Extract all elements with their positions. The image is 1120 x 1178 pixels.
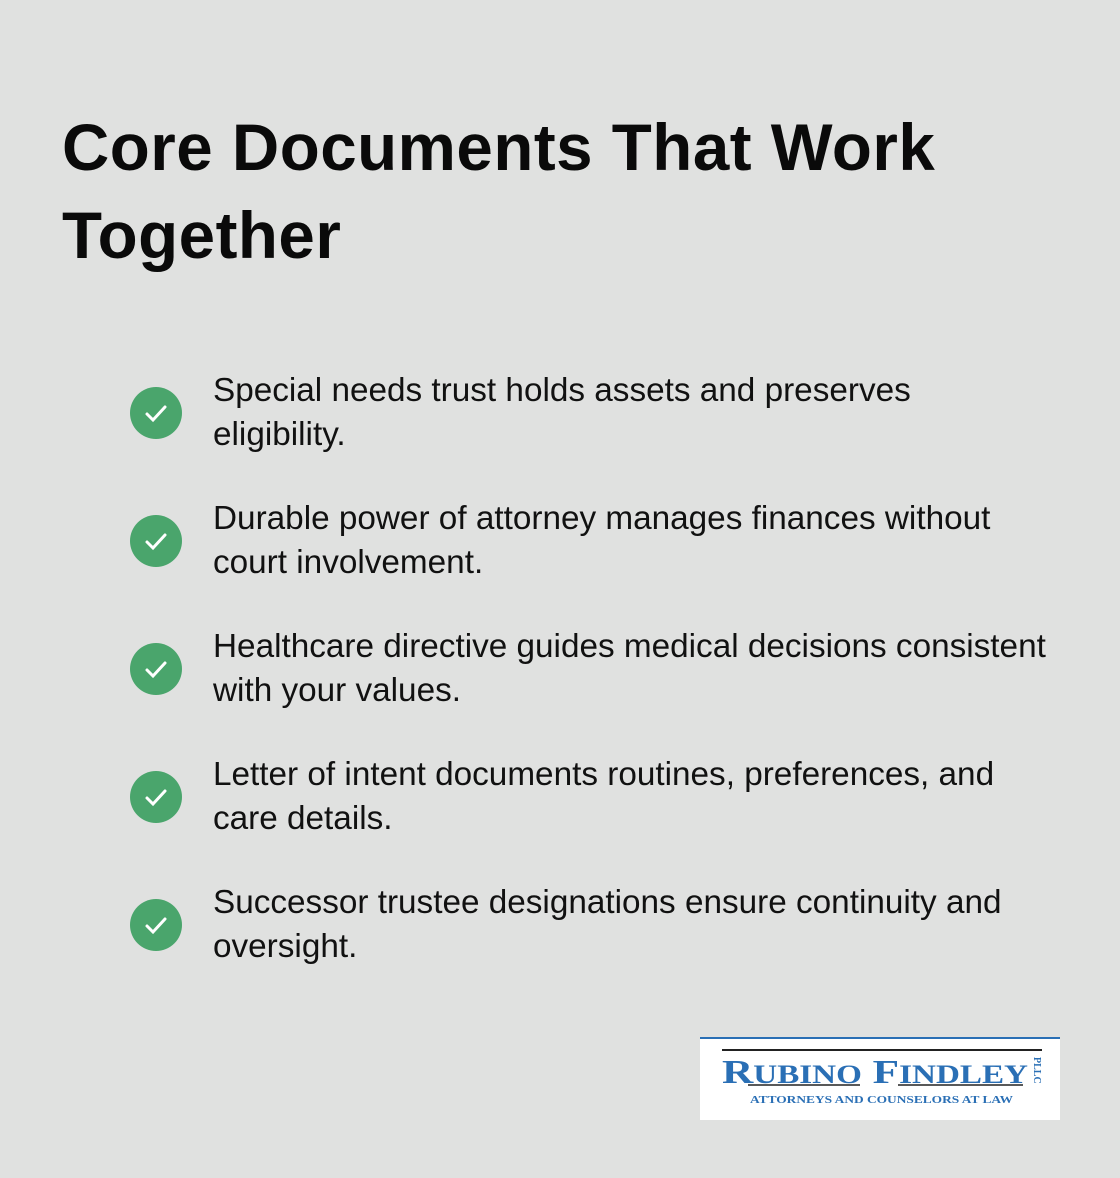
icon: check bbox=[130, 643, 182, 695]
text 4 bbox=[213, 756, 994, 837]
item 2 bbox=[130, 500, 990, 581]
logo: PLLC bbox=[1031, 1057, 1042, 1084]
title: Core Documents That Work bbox=[62, 111, 935, 184]
item 4 bbox=[130, 756, 994, 837]
text 3 bbox=[213, 628, 1046, 709]
text 1 bbox=[213, 372, 911, 453]
item 5 bbox=[130, 884, 1002, 965]
logo: R UBINO F INDLEY bbox=[722, 1054, 1028, 1091]
icon: check bbox=[130, 771, 182, 823]
text 5: Successor trustee designations ensure continuity and bbox=[213, 884, 1002, 921]
text 4: Letter of intent documents routines, preferences, and bbox=[213, 756, 994, 793]
title: Together bbox=[62, 199, 341, 272]
icon: check bbox=[130, 899, 182, 951]
text 4: care details. bbox=[213, 800, 393, 837]
logo: ATTORNEYS AND COUNSELORS AT LAW bbox=[750, 1095, 1013, 1106]
text 2: court involvement. bbox=[213, 544, 483, 581]
text 5: oversight. bbox=[213, 928, 357, 965]
text 5 bbox=[213, 884, 1002, 965]
icon: check bbox=[130, 515, 182, 567]
text 1: eligibility. bbox=[213, 416, 346, 453]
item 1 bbox=[130, 372, 911, 453]
text 3: Healthcare directive guides medical decisions consistent bbox=[213, 628, 1046, 665]
title bbox=[62, 111, 935, 272]
text 2 bbox=[213, 500, 990, 581]
text 2: Durable power of attorney manages finances without bbox=[213, 500, 990, 537]
text 1: Special needs trust holds assets and preserves bbox=[213, 372, 911, 409]
item 3 bbox=[130, 628, 1046, 709]
icon: check bbox=[130, 387, 182, 439]
text 3: with your values. bbox=[213, 672, 461, 709]
logo bbox=[700, 1037, 1060, 1120]
